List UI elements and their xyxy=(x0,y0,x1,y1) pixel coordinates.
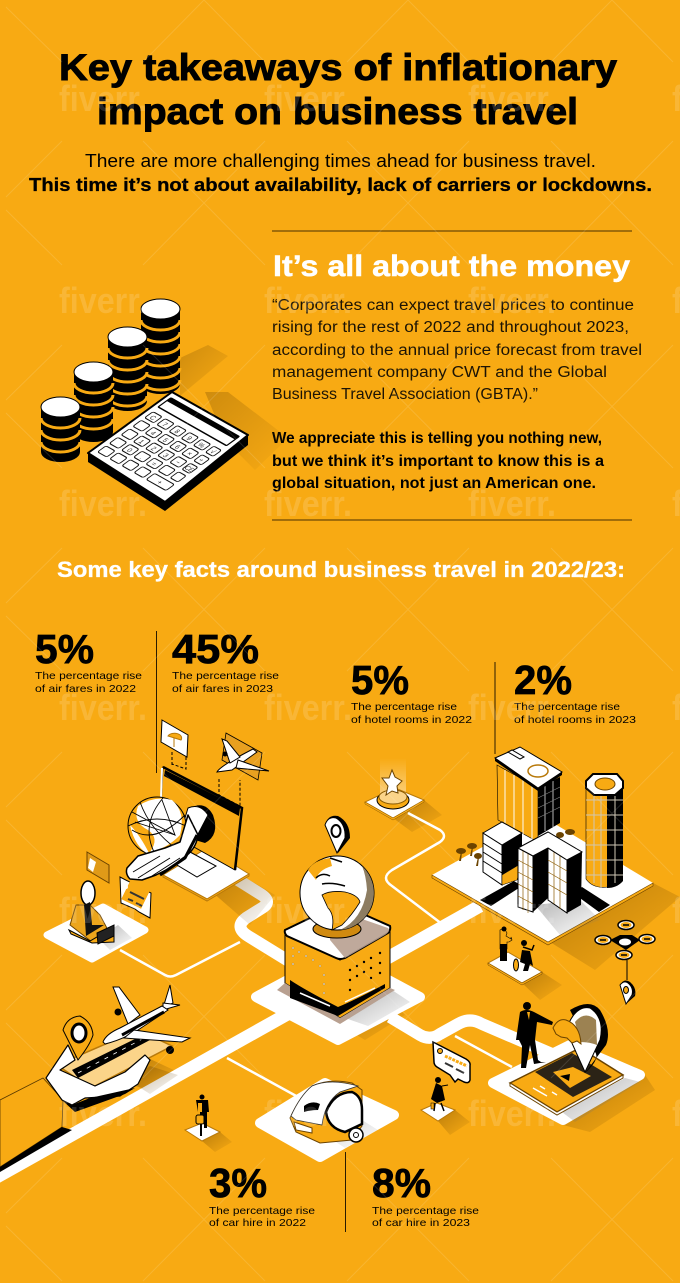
open hand xyxy=(126,815,198,880)
watermarks: fiverr. xyxy=(59,78,147,119)
coin stack 2 xyxy=(74,362,113,442)
coin stack 1 xyxy=(41,397,80,462)
calculator: 1 xyxy=(136,439,146,445)
stat: car hire 2023: The percentage rise xyxy=(372,1205,479,1217)
sleeve xyxy=(0,1078,63,1167)
globe xyxy=(300,856,374,930)
quote text: “Corporates can expect travel prices to continue xyxy=(272,297,634,314)
calculator: 5 xyxy=(160,437,170,444)
illustration: businessman with tablet map xyxy=(510,1002,623,1115)
hotel plate xyxy=(432,815,653,942)
stat: car hire 2022: of car hire in 2022 xyxy=(209,1217,306,1229)
tower C xyxy=(483,822,522,885)
stat: air fares 2023: The percentage rise xyxy=(172,670,279,682)
tower A xyxy=(495,747,562,842)
businessman xyxy=(516,1002,553,1068)
shadows under platforms xyxy=(130,800,680,1152)
watermarks: fiverr. xyxy=(264,78,352,119)
stat: hotel rooms 2022 xyxy=(351,657,472,726)
stat: car hire 2022: The percentage rise xyxy=(209,1205,315,1217)
watermarks: fiverr. xyxy=(264,890,352,931)
coin stack 3 xyxy=(108,327,147,411)
platform: center xyxy=(256,953,420,1040)
calculator: C xyxy=(147,415,157,422)
route network xyxy=(0,800,680,1178)
coin stack 4 xyxy=(141,299,180,394)
stat: air fares 2023 xyxy=(172,626,279,695)
stat: hotel rooms 2023: of hotel rooms in 2023 xyxy=(514,714,636,726)
calculator: ÷ xyxy=(196,458,205,464)
illustration: traveller in seat xyxy=(69,852,151,944)
illustration: star plinth xyxy=(365,758,424,820)
calculator xyxy=(88,392,248,511)
calculator: × xyxy=(184,451,194,457)
calculator: 8 xyxy=(172,429,181,435)
watermarks: fiverr. xyxy=(59,1093,147,1134)
watermarks: fiverr. xyxy=(264,1093,352,1134)
calculator: . xyxy=(137,455,145,460)
bold statement: global situation, not just an American one. xyxy=(272,475,596,492)
calculator: CE xyxy=(182,465,196,474)
calculator: 3 xyxy=(161,453,170,459)
watermarks: fiverr. xyxy=(59,483,147,524)
drone pin xyxy=(620,981,635,1004)
watermarks: fiverr. xyxy=(468,483,556,524)
stat: car hire 2022 xyxy=(209,1160,315,1229)
stat: hotel rooms 2023: 2% xyxy=(514,657,572,703)
big pin xyxy=(570,1004,608,1073)
tower D xyxy=(518,832,582,913)
man xyxy=(500,928,512,949)
tower B xyxy=(586,774,623,888)
stat: car hire 2022: 3% xyxy=(209,1160,267,1206)
stat: air fares 2022: 5% xyxy=(35,626,94,672)
calculator: 4 xyxy=(148,431,157,437)
woman xyxy=(520,950,533,971)
stat: air fares 2022: The percentage rise xyxy=(35,670,142,682)
illustration: reviewer with speech bubble xyxy=(421,1042,470,1121)
heading: key facts: Some key facts around business travel in 2022/23: xyxy=(57,557,625,582)
watermarks: fiverr. xyxy=(59,890,147,931)
illustration: hand holding tablet with plane xyxy=(0,985,190,1172)
rating speech bubble xyxy=(120,877,151,918)
illustration: monitor with hand and globe xyxy=(126,720,269,901)
bold statement: but we think it’s important to know this is a xyxy=(272,453,604,470)
quote text: management company CWT and the Global xyxy=(272,364,607,381)
tablet xyxy=(57,1030,172,1088)
palms xyxy=(456,829,575,866)
illustration: porter xyxy=(185,1094,220,1141)
illustration: globe on plinth xyxy=(277,816,395,1024)
globe stand xyxy=(313,920,361,938)
title xyxy=(59,47,617,132)
hand xyxy=(46,1045,150,1105)
calculator: = xyxy=(149,461,158,468)
small photo card xyxy=(87,852,109,883)
illustration: travellers on plate xyxy=(488,926,542,985)
watermarks: fiverr. xyxy=(468,1093,556,1134)
plinth dots xyxy=(292,947,325,994)
watermarks: fiverr. xyxy=(59,280,147,321)
runway xyxy=(72,1035,150,1078)
illustration: hotel district xyxy=(432,747,653,945)
panel: money section xyxy=(272,231,642,520)
stat: air fares 2022: of air fares in 2022 xyxy=(35,683,136,695)
stat: hotel rooms 2022: of hotel rooms in 2022 xyxy=(351,714,472,726)
bold statement: We appreciate this is telling you nothing new, xyxy=(272,430,602,447)
monitor stand xyxy=(163,848,249,899)
calculator: 2 xyxy=(148,446,158,452)
watermarks: fiverr. xyxy=(468,78,556,119)
tablet xyxy=(510,1048,623,1112)
platform: tablet xyxy=(493,1045,640,1122)
woman xyxy=(435,1077,441,1083)
intro text xyxy=(29,151,652,195)
shadow on road under monitor xyxy=(212,872,275,925)
platform: seat xyxy=(47,907,145,959)
stat: hotel rooms 2022: 5% xyxy=(351,657,409,703)
quote text: according to the annual price forecast from travel xyxy=(272,342,642,359)
quote text xyxy=(272,297,642,403)
watermarks: fiverr. xyxy=(468,280,556,321)
seat and passenger xyxy=(69,881,114,944)
stat: air fares 2022 xyxy=(35,626,142,695)
calculator: % xyxy=(195,442,206,449)
roads xyxy=(480,881,522,906)
heading: all about the money: It’s all about the money xyxy=(273,250,630,283)
review bubble xyxy=(433,1042,470,1083)
stat: car hire 2023 xyxy=(372,1160,479,1229)
watermarks xyxy=(59,78,680,1134)
calculator: 7 xyxy=(160,422,169,428)
location pin xyxy=(325,816,350,853)
quote text: rising for the rest of 2022 and throughout 2023, xyxy=(272,319,629,336)
watermarks: fiverr. xyxy=(59,687,147,728)
watermarks: fiverr. xyxy=(468,687,556,728)
title: impact on business travel xyxy=(97,91,578,132)
calculator: √ xyxy=(208,448,218,455)
intro text: There are more challenging times ahead for business travel. xyxy=(85,151,596,171)
platform: car xyxy=(260,1083,394,1157)
plinth body xyxy=(285,932,390,1018)
watermarks: fiverr. xyxy=(264,687,352,728)
sleeve in screen xyxy=(190,805,215,843)
title: Key takeaways of inflationary xyxy=(59,47,617,88)
watermarks: fiverr. xyxy=(264,483,352,524)
bold statement xyxy=(272,430,604,492)
icon: coin stacks and calculator xyxy=(41,299,288,511)
illustration: car xyxy=(290,1081,363,1143)
illustration: drone and pin xyxy=(595,920,655,1004)
watermarks: fiverr. xyxy=(468,890,556,931)
calculator: + xyxy=(154,480,164,486)
awning xyxy=(553,1020,581,1044)
calculator: 6 xyxy=(172,444,182,451)
watermarks: fiverr. xyxy=(264,280,352,321)
floating plane card xyxy=(217,733,269,806)
floating photo card xyxy=(161,720,188,769)
stat: car hire 2023: 8% xyxy=(372,1160,431,1206)
stat: air fares 2023: of air fares in 2023 xyxy=(172,683,273,695)
stat: hotel rooms 2022: The percentage rise xyxy=(351,701,457,713)
stat: hotel rooms 2023 xyxy=(514,657,636,726)
calculator: − xyxy=(173,460,182,466)
map pin xyxy=(63,1016,93,1060)
stat: car hire 2023: of car hire in 2023 xyxy=(372,1217,470,1229)
monitor screen xyxy=(160,767,242,870)
globe with network xyxy=(128,797,186,855)
airliner xyxy=(103,985,190,1044)
stat: hotel rooms 2023: The percentage rise xyxy=(514,701,620,713)
calculator: 9 xyxy=(184,436,193,442)
plinth top xyxy=(285,905,390,959)
quote text: Business Travel Association (GBTA).” xyxy=(272,386,538,403)
intro text: This time it’s not about availability, lack of carriers or lockdowns. xyxy=(29,175,652,195)
stat: air fares 2023: 45% xyxy=(172,626,259,672)
calculator: 0 xyxy=(125,448,134,454)
